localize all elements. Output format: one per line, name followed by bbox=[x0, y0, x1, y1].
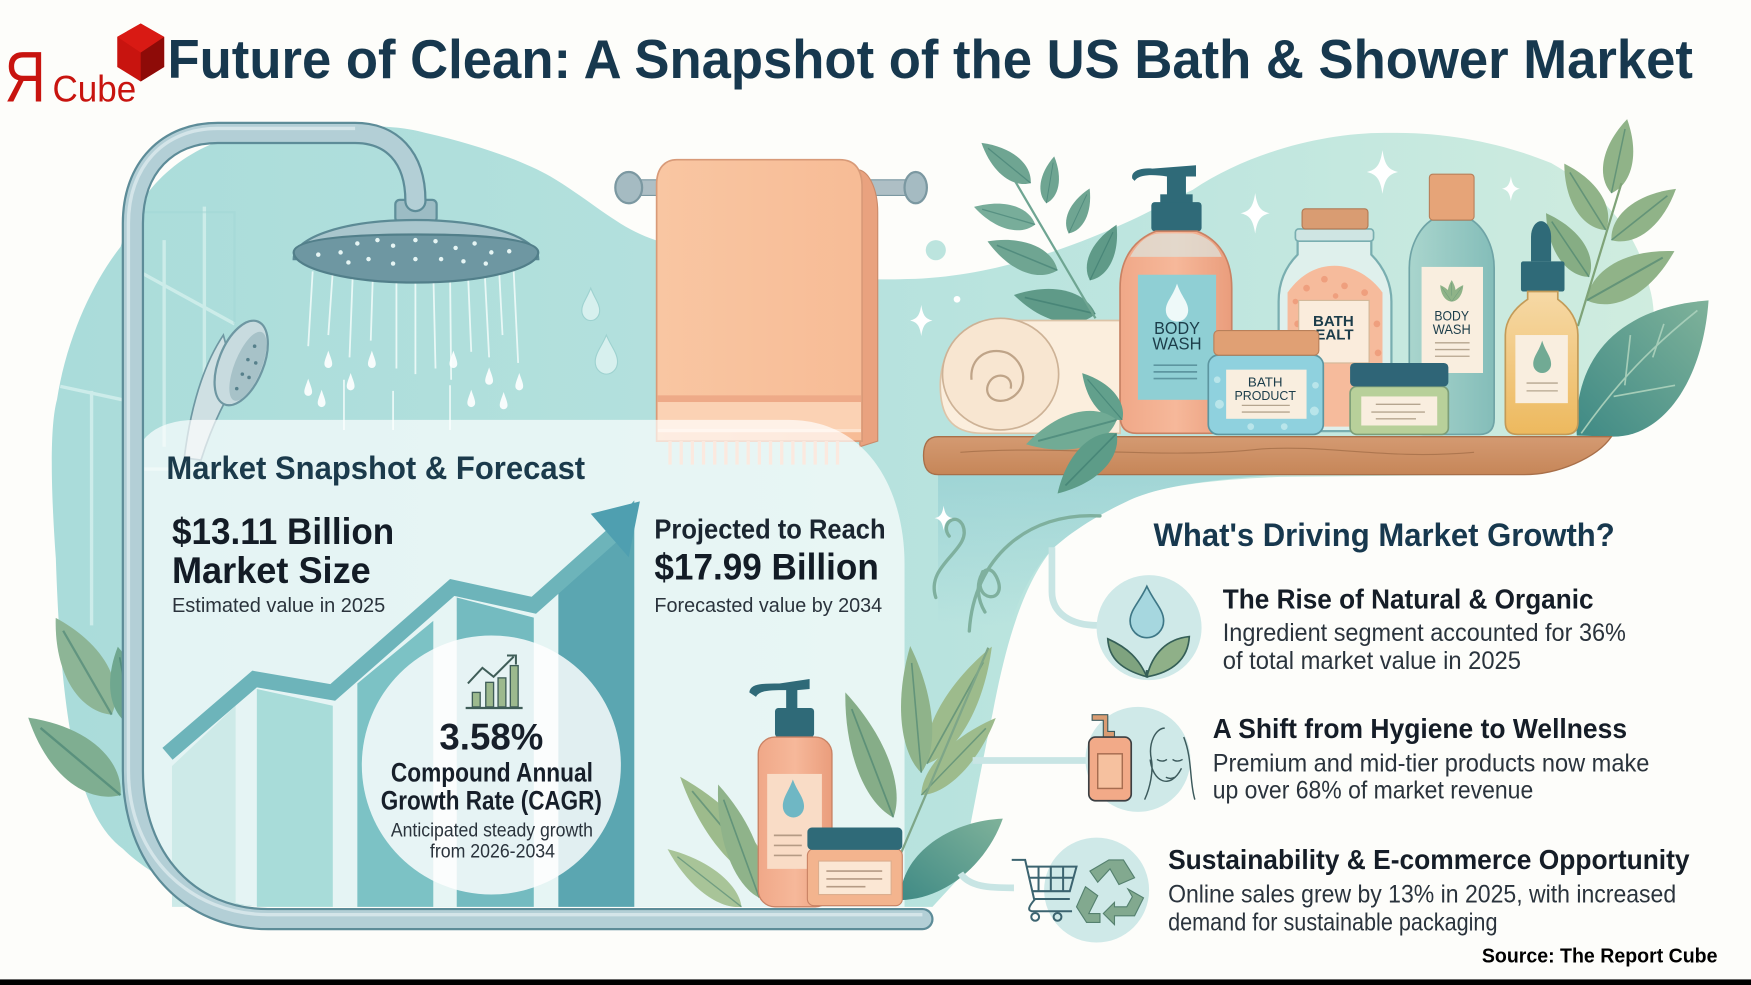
forecast value: $17.99 Billion bbox=[654, 547, 879, 588]
CAGR label line 2: Growth Rate (CAGR) bbox=[381, 786, 602, 816]
driver 3 line 2: demand for sustainable packaging bbox=[1168, 909, 1498, 936]
towel bbox=[657, 160, 878, 465]
jar label line 1: BATH bbox=[1313, 313, 1354, 330]
small jar bbox=[807, 828, 902, 906]
small pump bottle bbox=[749, 679, 832, 907]
jar label line 2: PRODUCT bbox=[1235, 388, 1296, 403]
market size note: Estimated value in 2025 bbox=[172, 594, 385, 617]
body wash bottle bbox=[1120, 165, 1232, 433]
panel: market snapshot glass card bbox=[130, 420, 905, 907]
jar label line 2: EALT bbox=[1315, 327, 1354, 344]
tall bottle label line 1: BODY bbox=[1434, 308, 1469, 324]
wooden shelf bbox=[924, 437, 1611, 475]
CAGR note line 2: from 2026-2034 bbox=[430, 842, 555, 863]
water stream and drops bbox=[304, 271, 618, 430]
forecast label: Projected to Reach bbox=[654, 513, 886, 544]
bath salt jar bbox=[1279, 209, 1391, 431]
CAGR label line 1: Compound Annual bbox=[391, 758, 593, 788]
tall bottle label line 2: WASH bbox=[1433, 321, 1471, 337]
tile pattern bbox=[60, 207, 235, 625]
driver 2 line 2: up over 68% of market revenue bbox=[1213, 777, 1533, 804]
section heading: drivers: What's Driving Market Growth? bbox=[1154, 517, 1615, 553]
bottom black strip bbox=[0, 979, 1751, 985]
source note: Source: The Report Cube bbox=[1482, 946, 1717, 968]
connector lines bbox=[960, 547, 1098, 888]
jar label line 1: BATH bbox=[1248, 374, 1283, 389]
driver 1 bbox=[1223, 584, 1626, 675]
logo cube bbox=[117, 23, 164, 82]
forecast note: Forecasted value by 2034 bbox=[654, 594, 882, 617]
driver 2 heading: A Shift from Hygiene to Wellness bbox=[1213, 713, 1627, 744]
CAGR note line 1: Anticipated steady growth bbox=[391, 820, 593, 841]
right plant leaves bbox=[971, 116, 1709, 437]
driver 3 heading: Sustainability & E-commerce Opportunity bbox=[1168, 844, 1690, 875]
driver 2 line 1: Premium and mid-tier products now make bbox=[1213, 751, 1649, 778]
CAGR circle bbox=[362, 635, 621, 895]
tall bottle bbox=[1409, 174, 1494, 434]
driver 1 line 2: of total market value in 2025 bbox=[1223, 648, 1521, 675]
lower right plant bbox=[660, 639, 1006, 917]
dropper bottle bbox=[1505, 221, 1578, 434]
driver 3 bbox=[1168, 844, 1690, 936]
icon: bottle and face bbox=[1085, 707, 1195, 812]
logo bbox=[4, 23, 164, 118]
left plant leaves bbox=[14, 607, 147, 812]
driver 3 line 1: Online sales grew by 13% in 2025, with increased bbox=[1168, 881, 1676, 908]
vines decoration bbox=[934, 516, 1100, 631]
title: Future of Clean: A Snapshot of the US Bath & Shower Market bbox=[168, 28, 1693, 90]
driver 1 line 1: Ingredient segment accounted for 36% bbox=[1223, 620, 1626, 647]
hand shower bbox=[184, 313, 279, 460]
panel heading: Market Snapshot & Forecast bbox=[166, 450, 585, 486]
market size value: $13.11 Billion bbox=[172, 511, 394, 552]
growth arrow bbox=[168, 501, 640, 754]
bottle label line 1: BODY bbox=[1154, 318, 1200, 338]
shower pipe bbox=[128, 128, 922, 919]
logo letter: Я bbox=[4, 38, 46, 118]
driver 1 heading: The Rise of Natural & Organic bbox=[1223, 584, 1594, 615]
towel rack bbox=[615, 172, 927, 203]
shower head bbox=[294, 200, 538, 283]
rolled towel bbox=[940, 318, 1120, 433]
sparkles and dots bbox=[910, 150, 1520, 531]
bottle label line 2: WASH bbox=[1152, 334, 1202, 354]
background blob: teal and mint wash bbox=[52, 126, 1654, 907]
icon: cart and recycling bbox=[1012, 838, 1149, 943]
bar chart bbox=[172, 500, 634, 907]
icon: growth chart bbox=[466, 656, 523, 708]
shadow under shelf bbox=[938, 475, 1280, 625]
green jar bbox=[1350, 363, 1448, 434]
bath product jar bbox=[1208, 331, 1323, 434]
market size label: Market Size bbox=[172, 550, 371, 591]
shelf leaves bbox=[1022, 366, 1131, 505]
CAGR value: 3.58% bbox=[439, 716, 543, 757]
icon: natural drop and leaves bbox=[1097, 575, 1202, 680]
logo word: Cube bbox=[52, 69, 136, 110]
driver 2 bbox=[1213, 713, 1649, 804]
